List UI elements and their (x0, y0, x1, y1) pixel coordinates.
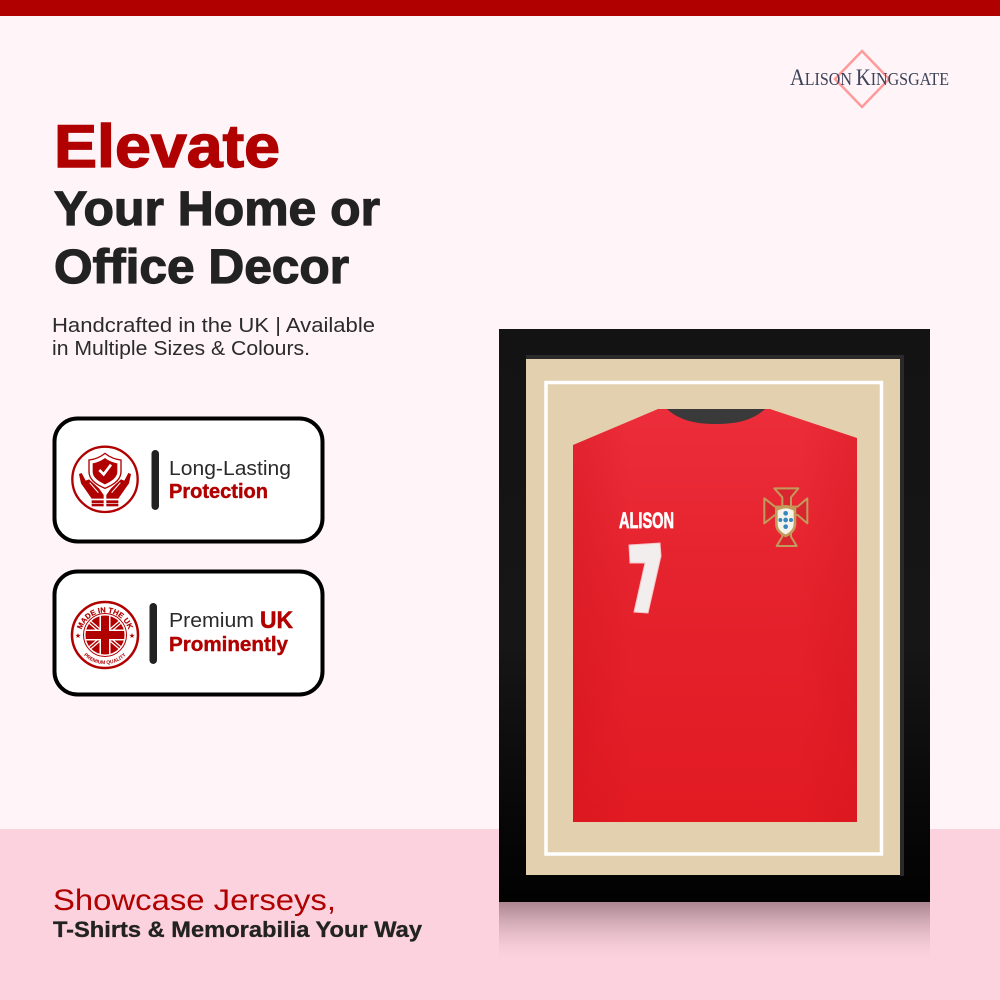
divider (150, 603, 157, 664)
beige mat (526, 359, 900, 875)
tagline line 2: T-Shirts & Memorabilia Your Way (53, 917, 423, 942)
card text: UK (260, 607, 294, 634)
black frame (499, 329, 930, 902)
card text (169, 458, 291, 503)
jersey crest (764, 488, 807, 546)
jersey name: ALISON (619, 508, 674, 533)
top bar (0, 0, 1000, 16)
icon: made in the UK stamp: MADE IN THE UK (76, 607, 134, 630)
tagline (53, 884, 423, 942)
logo wordmark: ALISON KINGSGATE (790, 65, 949, 90)
heading line: Your Home or: Your Home or (54, 183, 380, 236)
logo diamond (835, 51, 889, 107)
heading line: Elevate: Elevate (54, 113, 280, 180)
icon: made in the UK stamp: PREMIUM QUALITY (84, 652, 126, 665)
white inner border (546, 382, 882, 854)
icon: shield in hands (72, 447, 138, 512)
card box (54, 572, 322, 694)
icon: made in the UK stamp: ★ (75, 632, 81, 640)
card text (169, 607, 294, 656)
subheading (52, 315, 375, 360)
logo: Alison Kingsgate (790, 51, 949, 107)
jersey collar (667, 409, 765, 424)
red jersey (573, 409, 857, 822)
card box (54, 418, 322, 542)
card: long-lasting protection (54, 418, 322, 542)
card: premium UK (52, 570, 324, 696)
frame reflection (499, 902, 930, 964)
subheading line 2: in Multiple Sizes & Colours. (52, 338, 310, 360)
card text: Prominently (169, 634, 289, 656)
heading (54, 113, 380, 294)
subheading line 1: Handcrafted in the UK | Available (52, 315, 375, 337)
card text: Premium (169, 610, 254, 632)
bottom band (0, 829, 1000, 1000)
jersey number 7 (629, 543, 661, 613)
divider (152, 450, 159, 510)
heading line: Office Decor: Office Decor (54, 241, 349, 294)
tagline line 1: Showcase Jerseys, (53, 884, 336, 917)
icon: made in the UK stamp (70, 600, 140, 670)
icon: made in the UK stamp: ★ (129, 632, 135, 640)
card text: Long-Lasting (169, 458, 291, 480)
framed jersey (499, 329, 930, 964)
card text: Protection (169, 481, 268, 503)
